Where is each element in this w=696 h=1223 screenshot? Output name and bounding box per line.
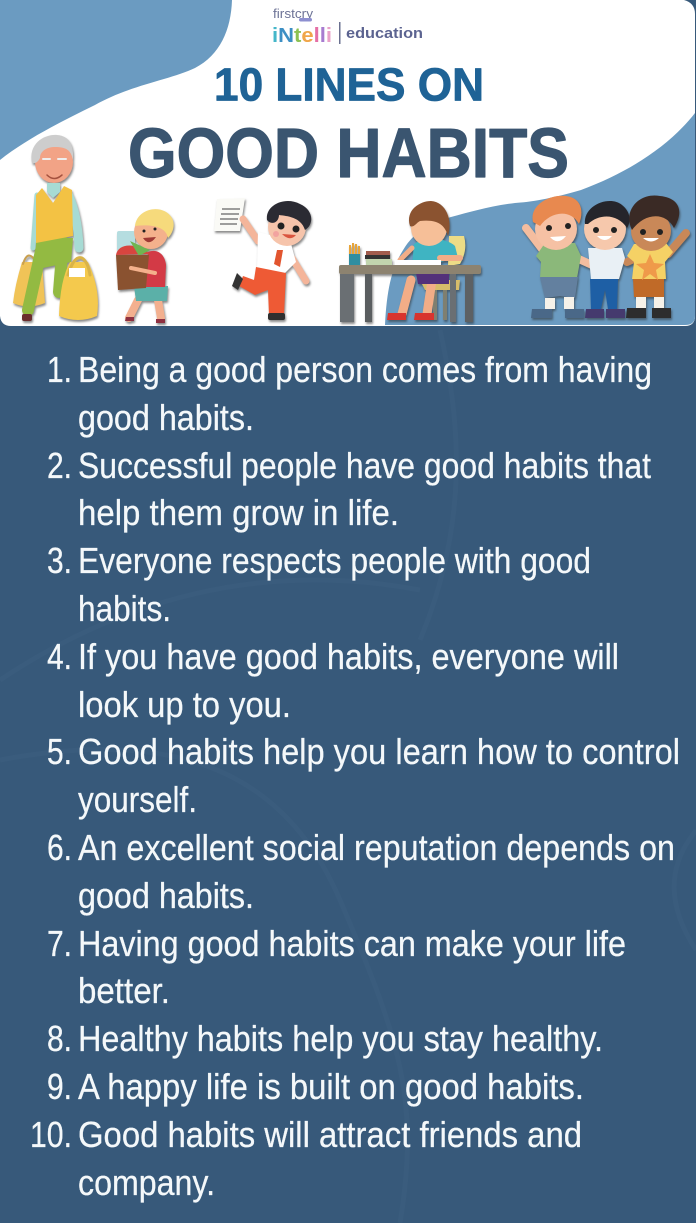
logo: iNtelli <box>272 25 332 47</box>
logo: education <box>346 25 423 42</box>
item 8: Healthy habits help you stay healthy. <box>78 1018 603 1059</box>
title line 2: GOOD HABITS <box>128 114 569 192</box>
item 2: 2. <box>47 445 72 486</box>
item 7: better. <box>78 970 170 1011</box>
decorative blue wave top left <box>0 0 232 160</box>
item 1 <box>47 349 652 438</box>
illustration: boy carrying groceries <box>116 209 174 323</box>
item 6: 6. <box>47 827 72 868</box>
title line 1: 10 LINES ON <box>214 58 484 110</box>
item 4: 4. <box>47 636 72 677</box>
item 5: yourself. <box>78 779 197 820</box>
item 6 <box>47 827 675 916</box>
logo <box>272 6 423 47</box>
item 2: help them grow in life. <box>78 492 399 533</box>
item 10: Good habits will attract friends and <box>78 1114 582 1155</box>
item 4: If you have good habits, everyone will <box>78 636 619 677</box>
item 8: 8. <box>47 1018 72 1059</box>
item 10: company. <box>78 1162 215 1203</box>
item 10 <box>30 1114 582 1203</box>
item 1: good habits. <box>78 397 254 438</box>
item 3: 3. <box>47 540 72 581</box>
illustration: three friends waving <box>526 195 686 318</box>
item 2 <box>47 445 651 533</box>
item 3: Everyone respects people with good <box>78 540 591 581</box>
logo: firstcry <box>273 6 314 21</box>
item 1: 1. <box>47 349 72 390</box>
item 7: Having good habits can make your life <box>78 923 626 964</box>
item 9: 9. <box>47 1066 72 1107</box>
item 5: 5. <box>47 731 72 772</box>
item 4: look up to you. <box>78 684 291 725</box>
item 7 <box>47 923 626 1011</box>
item 4 <box>47 636 619 725</box>
item 3 <box>47 540 591 629</box>
decorative blue wave bottom right <box>385 113 695 325</box>
panel: header illustration <box>0 0 695 326</box>
item 10: 10. <box>30 1114 72 1155</box>
item 9: A happy life is built on good habits. <box>78 1066 584 1107</box>
numbered list <box>30 349 680 1203</box>
item 5 <box>47 731 680 820</box>
item 3: habits. <box>78 588 171 629</box>
item 7: 7. <box>47 923 72 964</box>
illustration: boy holding test paper <box>214 198 311 320</box>
illustration: boy studying at desk <box>339 201 481 322</box>
item 6: good habits. <box>78 875 254 916</box>
illustration: grandfather with bags <box>13 135 98 321</box>
